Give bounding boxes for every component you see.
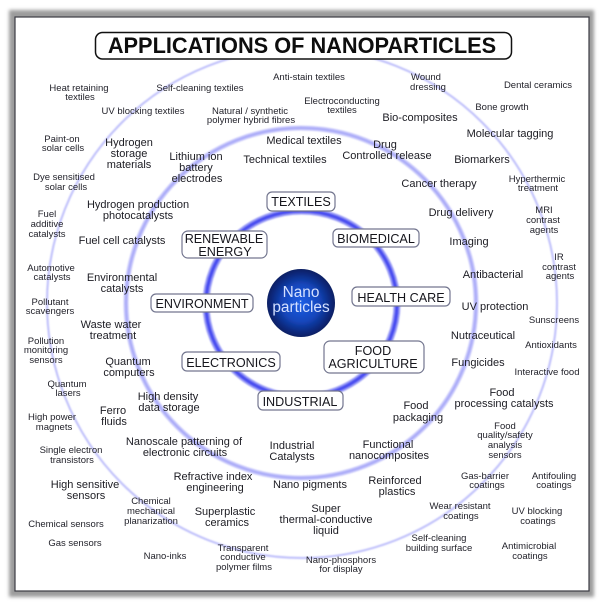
middle tier labels [51, 112, 554, 537]
outer tier labels: Electroconducting [304, 96, 380, 107]
outer tier labels: Pollution [28, 336, 64, 347]
category: textiles [267, 192, 335, 211]
middle tier labels: liquid [313, 525, 339, 537]
middle tier labels: Catalysts [269, 451, 315, 463]
middle tier labels: Nutraceutical [451, 330, 515, 342]
middle tier labels: Environmental [87, 272, 157, 284]
outer tier labels: Quantum [47, 379, 87, 390]
outer tier labels: textiles [327, 105, 357, 116]
middle tier labels: Fungicides [451, 357, 505, 369]
outer tier labels: Pollutant [32, 297, 69, 308]
outer tier labels: polymer hybrid fibres [207, 115, 295, 126]
middle tier labels: electronic circuits [143, 447, 228, 459]
middle tier labels: Medical textiles [266, 135, 342, 147]
middle ring [126, 128, 476, 478]
outer tier labels: scavengers [26, 306, 75, 317]
middle tier labels: packaging [393, 412, 443, 424]
middle tier labels: sensors [67, 490, 106, 502]
middle tier labels: Drug [373, 139, 397, 151]
category: textiles: TEXTILES [271, 195, 331, 209]
middle tier labels: nanocomposites [349, 450, 430, 462]
outer tier labels: Dental ceramics [504, 80, 572, 91]
outer tier labels: Heat retaining [49, 83, 109, 94]
middle tier labels: Industrial [270, 440, 314, 452]
outer tier labels: High power [28, 412, 76, 423]
middle tier labels: Nano pigments [273, 479, 347, 491]
outer tier labels: Paint-on [44, 134, 80, 145]
middle tier labels: electrodes [172, 173, 223, 185]
middle tier labels: Waste water [81, 319, 142, 331]
outer tier labels: sensors [488, 450, 522, 461]
outer tier labels: analysis [488, 440, 522, 451]
category: industrial: INDUSTRIAL [263, 395, 337, 409]
outer tier labels: dressing [410, 82, 446, 93]
middle tier labels: Biomarkers [454, 154, 510, 166]
outer tier labels: Nano-phosphors [306, 555, 376, 566]
middle tier labels: Cancer therapy [401, 178, 477, 190]
outer tier labels: catalysts [34, 272, 71, 283]
middle tier labels: battery [179, 162, 213, 174]
middle tier labels: Bio-composites [382, 112, 458, 124]
middle tier labels: Reinforced [368, 475, 422, 487]
outer tier labels: Chemical sensors [28, 519, 104, 530]
outer tier labels: agents [546, 271, 575, 282]
outer tier labels: conductive [220, 552, 266, 563]
middle tier labels: Molecular tagging [467, 128, 553, 140]
outer tier labels: textiles [65, 92, 95, 103]
middle tier labels: plastics [379, 486, 416, 498]
category: health care [352, 287, 450, 306]
middle tier labels: Refractive index [174, 471, 253, 483]
category: electronics [182, 352, 280, 371]
middle tier labels: treatment [90, 330, 136, 342]
middle tier labels: engineering [186, 482, 244, 494]
outer tier labels: catalysts [29, 229, 66, 240]
central orb: Nanoparticles [267, 269, 335, 337]
middle tier labels: Imaging [449, 236, 489, 248]
category: food agriculture [324, 341, 424, 373]
outer tier labels: solar cells [42, 143, 84, 154]
central orb: Nanoparticles: Nano [283, 284, 319, 301]
category: renewable energy: RENEWABLE [185, 232, 263, 246]
category: food agriculture: FOOD [355, 344, 391, 358]
middle tier labels: High density [138, 391, 199, 403]
outer tier labels: UV blocking textiles [102, 106, 185, 117]
category: biomedical: BIOMEDICAL [337, 232, 415, 246]
category: industrial [258, 391, 343, 410]
middle tier labels: Drug delivery [429, 207, 494, 219]
outer tier labels: coatings [512, 551, 548, 562]
outer tier labels: additive [31, 219, 63, 230]
middle tier labels: fluids [101, 416, 127, 428]
outer tier labels: Self-cleaning textiles [156, 83, 244, 94]
middle tier labels: Ferro [100, 405, 126, 417]
outer tier labels: coatings [520, 516, 556, 527]
outer tier labels: Chemical [131, 496, 171, 507]
middle tier labels: Technical textiles [243, 154, 327, 166]
outer tier labels: coatings [536, 480, 572, 491]
outer tier labels: building surface [406, 543, 472, 554]
outer tier labels: for display [319, 564, 363, 575]
outer tier labels: Natural / synthetic [212, 106, 288, 117]
middle tier labels: Hydrogen [105, 137, 153, 149]
outer tier labels: Antioxidants [525, 340, 577, 351]
outer tier labels: Interactive food [515, 367, 579, 378]
category: food agriculture: AGRICULTURE [328, 357, 418, 371]
outer tier labels: Fuel [38, 209, 56, 220]
middle tier labels: photocatalysts [103, 210, 174, 222]
outer tier labels: Self-cleaning [412, 533, 466, 544]
middle tier labels: Food [489, 387, 515, 399]
outer tier labels: Gas sensors [48, 538, 102, 549]
middle tier labels: storage [111, 148, 147, 160]
outer tier labels: Single electron [40, 445, 102, 456]
middle tier labels: Superplastic [195, 506, 256, 518]
outer tier labels: lasers [55, 388, 81, 399]
outer tier labels: IR [554, 252, 564, 263]
outer tier labels: sensors [29, 355, 63, 366]
outer tier labels: Bone growth [475, 102, 529, 113]
inner ring [206, 211, 397, 397]
outer tier labels: Anti-stain textiles [273, 72, 345, 83]
outer tier labels: UV blocking [512, 506, 562, 517]
middle tier labels: High sensitive [51, 479, 119, 491]
outer tier labels: quality/safety [477, 430, 533, 441]
outer tier labels: Nano-inks [144, 551, 187, 562]
middle tier labels: ceramics [205, 517, 249, 529]
middle tier labels: data storage [138, 402, 200, 414]
outer tier labels: Food [494, 421, 516, 432]
outer tier labels: transistors [50, 455, 94, 466]
category: renewable energy [182, 231, 267, 259]
middle tier labels: Lithium ion [169, 151, 223, 163]
category: health care: HEALTH CARE [357, 291, 445, 305]
outer tier labels: contrast [542, 262, 576, 273]
middle tier labels: Food [403, 400, 429, 412]
outer tier labels: agents [530, 225, 559, 236]
middle tier labels: Nanoscale patterning of [126, 436, 243, 448]
outer tier labels: Sunscreens [529, 315, 579, 326]
middle tier labels: Functional [363, 439, 413, 451]
category: environment: ENVIRONMENT [155, 297, 249, 311]
outer tier labels: polymer films [216, 562, 272, 573]
outer tier labels: Wear resistant [429, 501, 491, 512]
title: APPLICATIONS OF NANOPARTICLES [108, 33, 496, 58]
middle tier labels: Controlled release [342, 150, 432, 162]
outer tier labels: coatings [443, 511, 479, 522]
middle tier labels: Quantum [105, 356, 151, 368]
central orb: Nanoparticles: particles [272, 299, 330, 316]
outer tier labels [24, 72, 579, 575]
outer tier labels: solar cells [45, 182, 87, 193]
category: electronics: ELECTRONICS [186, 356, 276, 370]
middle tier labels: catalysts [101, 283, 144, 295]
outer tier labels: Antimicrobial [502, 541, 556, 552]
outer tier labels: Antifouling [532, 471, 576, 482]
outer tier labels: Hyperthermic [509, 174, 565, 185]
outer ring [47, 48, 557, 558]
outer tier labels: contrast [526, 215, 560, 226]
middle tier labels: UV protection [462, 301, 528, 313]
outer tier labels: coatings [469, 480, 505, 491]
outer tier labels: Dye sensitised [33, 172, 95, 183]
middle tier labels: Hydrogen production [87, 199, 189, 211]
middle tier labels: Antibacterial [463, 269, 523, 281]
outer tier labels: treatment [518, 183, 558, 194]
middle tier labels: Super [311, 503, 341, 515]
outer tier labels: MRI [535, 205, 553, 216]
outer tier labels: mechanical [127, 506, 175, 517]
middle tier labels: processing catalysts [454, 398, 554, 410]
outer tier labels: monitoring [24, 345, 68, 356]
outer tier labels: planarization [124, 516, 178, 527]
middle tier labels: materials [107, 159, 152, 171]
outer tier labels: Transparent [218, 543, 269, 554]
outer tier labels: Automotive [27, 263, 75, 274]
category labels [151, 192, 450, 410]
middle tier labels: computers [103, 367, 155, 379]
outer tier labels: Gas-barrier [461, 471, 509, 482]
outer tier labels: magnets [36, 422, 72, 433]
middle tier labels: thermal-conductive [280, 514, 372, 526]
outer tier labels: Wound [411, 72, 441, 83]
category: renewable energy: ENERGY [198, 245, 252, 259]
title box [96, 32, 512, 59]
middle tier labels: Fuel cell catalysts [79, 235, 166, 247]
